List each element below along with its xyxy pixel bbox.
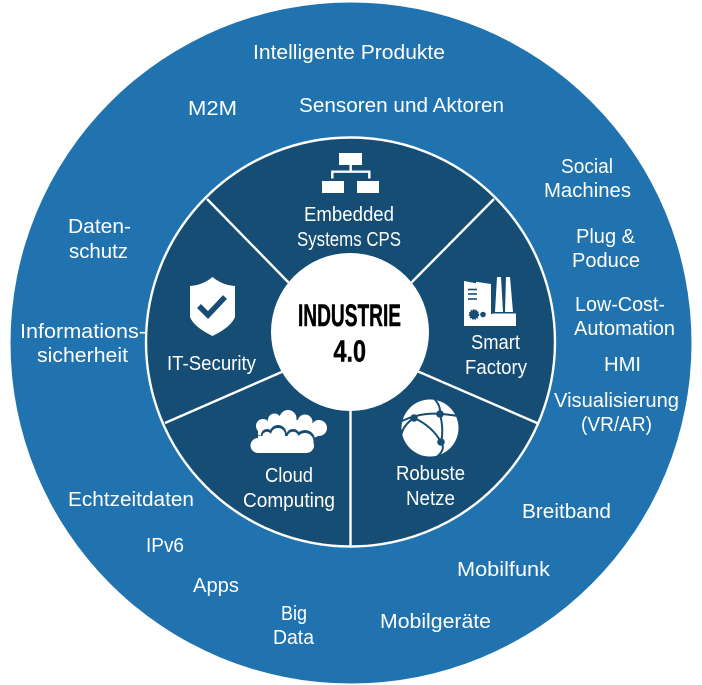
label: HMI: HMI — [604, 353, 641, 376]
segment: Cloud Computing — [243, 410, 335, 512]
text: Robuste Netze — [396, 462, 465, 510]
label: Visualisierung (VR/AR) — [554, 389, 679, 436]
text: Cloud Computing: Cloud — [265, 464, 313, 487]
segment: Robuste Netze — [396, 397, 465, 510]
icon: shield with check — [190, 277, 235, 336]
text: Cloud Computing: Computing — [243, 489, 335, 512]
text: Smart Factory: Factory — [465, 356, 528, 379]
text: Embedded Systems CPS: Systems CPS — [297, 228, 401, 251]
label: Big Data: Data — [273, 626, 315, 649]
center title: INDUSTRIE 4.0: 4.0 — [334, 334, 366, 368]
label: Datenschutz — [68, 215, 131, 263]
text: Smart Factory — [465, 331, 528, 379]
label: Low-Cost-Automation: Low-Cost- — [575, 293, 665, 316]
center title: INDUSTRIE 4.0: INDUSTRIE — [298, 297, 401, 333]
label: Datenschutz: schutz — [69, 240, 128, 263]
label: Social Machines: Social — [561, 155, 613, 178]
text: Robuste Netze: Netze — [406, 487, 455, 510]
inner disc — [146, 138, 555, 546]
label: IPv6: IPv6 — [146, 534, 184, 557]
label: Visualisierung (VR/AR): (VR/AR) — [581, 413, 652, 436]
label: Informationssicherheit: sicherheit — [37, 344, 128, 367]
segment: Embedded Systems CPS — [297, 153, 401, 251]
icon: globe network — [400, 397, 459, 459]
label: Intelligente Produkte: Intelligente Produkte — [253, 41, 445, 64]
label: Plug & Poduce: Poduce — [572, 249, 640, 272]
icon: factory — [464, 277, 516, 326]
text: Smart Factory: Smart — [471, 331, 520, 354]
label: Plug & Poduce: Plug & — [576, 225, 635, 248]
text: Embedded Systems CPS: Embedded — [304, 203, 394, 226]
label: Informationssicherheit: Informations- — [20, 320, 146, 343]
icon: hierarchy — [322, 153, 379, 193]
label: M2M: M2M — [188, 97, 237, 120]
center circle — [271, 253, 429, 411]
label: Informationssicherheit — [20, 320, 146, 367]
label: Breitband: Breitband — [522, 500, 611, 523]
label: Social Machines: Machines — [544, 179, 631, 202]
label: Social Machines — [544, 155, 631, 202]
label: Mobilfunk: Mobilfunk — [457, 558, 551, 581]
text: Robuste Netze: Robuste — [396, 462, 465, 485]
center title: INDUSTRIE 4.0 — [298, 297, 401, 368]
label: Mobilgeräte: Mobilgeräte — [380, 610, 491, 633]
text: Cloud Computing — [243, 464, 335, 512]
label: Low-Cost-Automation — [574, 293, 675, 340]
label: Plug & Poduce — [572, 225, 640, 272]
label: Echtzeitdaten: Echtzeitdaten — [68, 488, 194, 511]
segment: IT-Security — [167, 277, 257, 375]
icon: cloud — [249, 410, 327, 454]
text: Embedded Systems CPS — [297, 203, 401, 251]
label: Visualisierung (VR/AR): Visualisierung — [554, 389, 679, 412]
label: Big Data: Big — [281, 602, 307, 625]
label: Low-Cost-Automation: Automation — [574, 317, 675, 340]
label: Big Data — [273, 602, 315, 649]
label: Datenschutz: Daten- — [68, 215, 131, 238]
text: IT-Security: IT-Security — [167, 352, 257, 375]
label: Sensoren und Aktoren: Sensoren und Aktoren — [299, 94, 504, 117]
label: Apps: Apps — [193, 574, 239, 597]
segment: Smart Factory — [464, 277, 528, 379]
